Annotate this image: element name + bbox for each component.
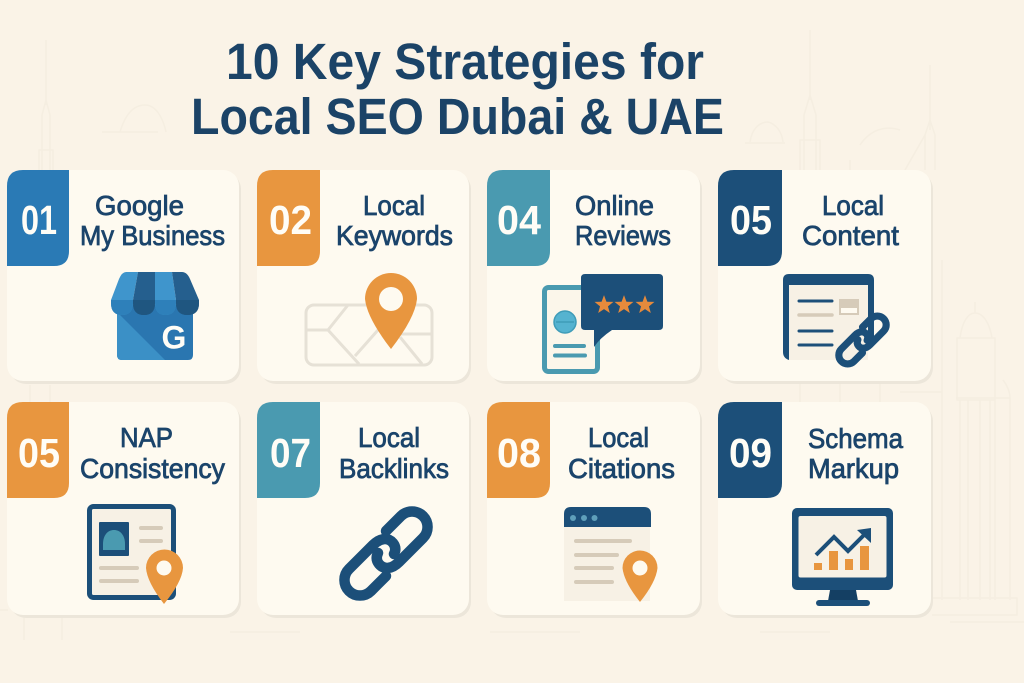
panel: 05 Local Content	[718, 170, 933, 384]
heading: Local Keywords: Keywords	[336, 220, 453, 251]
heading: Online Reviews: Reviews	[575, 220, 671, 251]
number badge 04	[487, 170, 550, 266]
heading: Local Keywords	[336, 190, 453, 251]
heading: Local Backlinks: Local	[358, 422, 420, 453]
heading: Google My Business: My Business	[80, 220, 225, 251]
heading: Local Backlinks	[339, 422, 449, 484]
number 08: 08	[497, 430, 541, 476]
heading: Schema Markup: Schema	[808, 423, 903, 454]
number 05: 05	[18, 430, 60, 476]
heading: Local Backlinks: Backlinks	[339, 453, 449, 484]
heading: Local Citations: Local	[588, 422, 649, 453]
heading: Local Keywords: Local	[363, 190, 425, 221]
panel: 02 Local Keywords	[257, 170, 471, 384]
number 02: 02	[269, 197, 312, 243]
icon: document with chain link	[783, 274, 886, 364]
panel: 09 Schema Markup	[718, 402, 933, 618]
number 07: 07	[270, 430, 311, 476]
icon: map with pin	[306, 273, 432, 365]
heading: Schema Markup	[808, 423, 903, 484]
icon: phone with star review bubble	[544, 274, 663, 372]
number badge 05	[718, 170, 782, 266]
number 05: 05	[730, 197, 772, 243]
number badge 05	[7, 402, 69, 498]
title	[191, 33, 724, 145]
icon: chain link	[344, 511, 428, 596]
heading: Local Citations	[568, 422, 675, 484]
heading: Google My Business: Google	[95, 190, 184, 221]
number badge 08	[487, 402, 550, 498]
icon: business listing with pin	[90, 506, 183, 604]
heading: NAP Consistency: Consistency	[80, 453, 225, 484]
number badge 07	[257, 402, 320, 498]
icon: monitor with growth chart	[792, 508, 893, 606]
title: 10 Key Strategies for	[226, 33, 704, 90]
heading: NAP Consistency: NAP	[120, 422, 173, 453]
heading: Online Reviews: Online	[575, 190, 654, 221]
icon: storefront with G: G	[162, 320, 186, 356]
heading: Local Citations: Citations	[568, 453, 675, 484]
icon: storefront with G	[111, 272, 199, 360]
heading: Schema Markup: Markup	[808, 453, 899, 484]
panel: 01 Google My Business	[7, 170, 241, 384]
panel: 04 Online Reviews	[487, 170, 702, 384]
heading: NAP Consistency	[80, 422, 225, 484]
heading: Local Content: Local	[822, 190, 884, 221]
number 04: 04	[497, 197, 541, 243]
number badge 01	[7, 170, 69, 266]
number 09: 09	[729, 430, 772, 476]
number badge 09	[718, 402, 782, 498]
panel: 05 NAP Consistency	[7, 402, 241, 618]
panel: 07 Local Backlinks	[257, 402, 471, 618]
heading: Google My Business	[80, 190, 225, 251]
number badge 02	[257, 170, 320, 266]
number 01: 01	[21, 197, 57, 243]
title: Local SEO Dubai & UAE	[191, 88, 724, 145]
icon: web directory with pin	[564, 507, 658, 602]
panel: 08 Local Citations	[487, 402, 702, 618]
heading: Local Content: Content	[802, 220, 899, 251]
heading: Local Content	[802, 190, 899, 251]
heading: Online Reviews	[575, 190, 671, 251]
